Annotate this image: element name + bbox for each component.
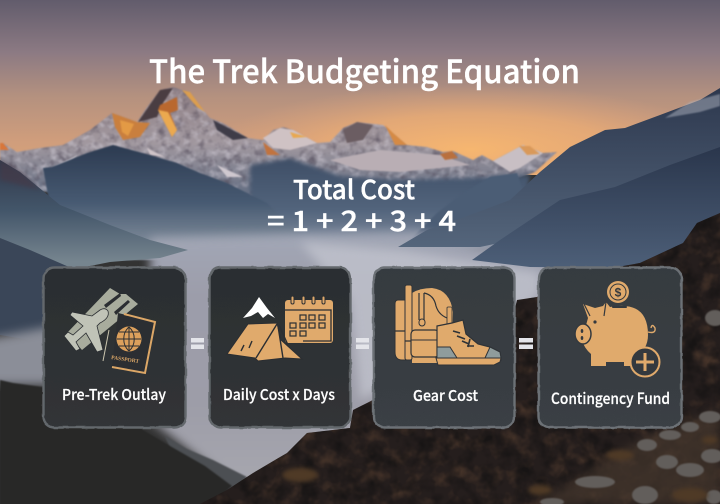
icon: piggy bank with coin and plus <box>575 281 660 376</box>
icon: plane ticket and passport <box>64 288 155 373</box>
rocks <box>540 310 720 504</box>
mist pool <box>150 232 640 490</box>
icon: backpack and boot <box>395 285 501 365</box>
equals sign <box>356 338 369 349</box>
snowy range <box>0 87 557 200</box>
panel: gear cost <box>374 268 514 428</box>
background: sky <box>0 0 720 175</box>
label: contingency fund: Contingency Fund <box>551 387 670 409</box>
icon: plane ticket and passport: PASSPORT <box>111 355 140 365</box>
formula: total cost <box>267 170 456 240</box>
foreground far grey ridge <box>165 436 247 490</box>
central dark hill <box>43 145 300 260</box>
panel: daily cost x days <box>210 268 350 428</box>
panel: contingency fund <box>538 268 682 428</box>
label: daily cost x days: Daily Cost x Days <box>223 384 335 405</box>
formula: total cost: Total Cost <box>293 170 415 207</box>
label: pre-trek outlay: Pre-Trek Outlay <box>62 384 166 405</box>
warm grass patches <box>282 436 718 502</box>
equals sign <box>191 338 204 349</box>
icon: tent, mountain and calendar <box>227 296 333 361</box>
valley layer under range <box>250 158 530 250</box>
equals sign <box>519 338 533 349</box>
lower left ridge <box>0 238 69 345</box>
label: gear cost: Gear Cost <box>413 385 478 406</box>
icon: piggy bank with coin and plus: $ <box>615 286 622 300</box>
bright mist behind cards <box>300 242 540 400</box>
foreground dark hill left <box>0 380 232 504</box>
warm lower slope <box>530 410 720 504</box>
right ridges <box>398 88 720 247</box>
foreground brown hillside right <box>200 213 720 504</box>
secondary right ridge <box>410 173 540 240</box>
panel: pre-trek outlay <box>44 268 186 428</box>
left dark mountain <box>0 160 188 272</box>
title: The Trek Budgeting Equation <box>149 47 580 93</box>
formula: total cost: = 1 + 2 + 3 + 4 <box>267 200 456 240</box>
